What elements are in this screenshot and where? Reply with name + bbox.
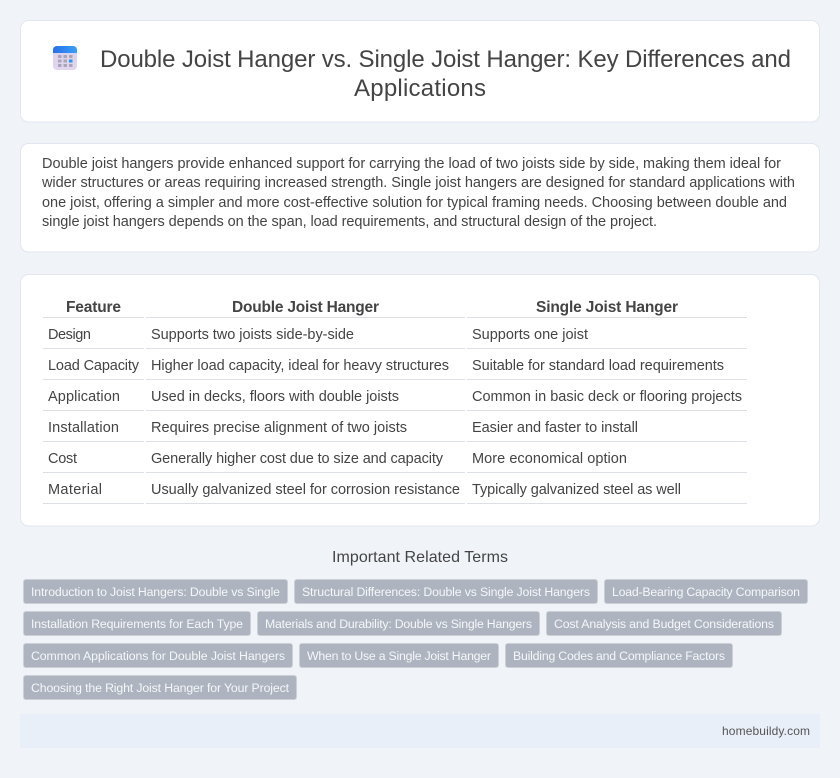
row: material: Usually galvanized steel for corrosion resistance: [151, 482, 460, 498]
row: material: Typically galvanized steel as well: [472, 482, 681, 498]
row: design: [48, 327, 588, 343]
row: design: Supports one joist: [472, 327, 588, 343]
tag: When to Use a Single Joist Hanger: [307, 649, 491, 663]
tag: Load-Bearing Capacity Comparison: [612, 585, 800, 599]
row: installation: Requires precise alignment of two joists: [151, 420, 407, 436]
text block: introduction: Double joist hangers provide enhanced support for carrying the load of two joists side by side, making them ideal for: [42, 156, 781, 172]
footer bar: [20, 714, 820, 748]
text block: introduction: one joist, offering a simpler and more cost-effective solution for typical framing needs. Choosing between double and: [42, 195, 787, 211]
row: cost: [48, 451, 627, 467]
row: load capacity: Load Capacity: [48, 358, 140, 374]
related terms tags: [24, 580, 808, 700]
table header: Single Joist Hanger: [536, 299, 678, 316]
row: installation: Easier and faster to install: [472, 420, 638, 436]
footer credit: homebuildy.com: [722, 724, 810, 738]
tag: Structural Differences: Double vs Single Joist Hangers: [302, 585, 590, 599]
tag: [24, 580, 288, 604]
tag: Building Codes and Compliance Factors: [513, 649, 725, 663]
panel: header: [20, 20, 820, 122]
row: design: Supports two joists side-by-side: [151, 327, 354, 343]
tag: [258, 612, 540, 636]
tag: Installation Requirements for Each Type: [31, 617, 243, 631]
table header: Double Joist Hanger: [232, 299, 379, 316]
row: application: Common in basic deck or flooring projects: [472, 389, 742, 405]
tag: [294, 580, 598, 604]
row: cost: Cost: [48, 451, 77, 467]
title: Applications: [354, 75, 486, 102]
row: load capacity: [48, 358, 724, 374]
row: material: [48, 482, 681, 498]
row: load capacity: Higher load capacity, ideal for heavy structures: [151, 358, 449, 374]
row: load capacity: Suitable for standard load requirements: [472, 358, 724, 374]
tag: [24, 644, 292, 668]
icon: calendar: [53, 46, 77, 70]
table header: [66, 299, 678, 316]
tag: Cost Analysis and Budget Considerations: [554, 617, 774, 631]
tag: [300, 644, 498, 668]
row: installation: Installation: [48, 420, 119, 436]
title: [100, 46, 791, 102]
table header: Feature: [66, 299, 121, 316]
panel: comparison table: [20, 274, 820, 526]
row: application: [48, 389, 742, 405]
panel: introduction: [20, 144, 820, 252]
text block: introduction: wider structures or areas requiring increased strength. Single joist hangers are designed for standard applications with: [41, 175, 795, 191]
row: cost: Generally higher cost due to size and capacity: [151, 451, 444, 467]
tag: Introduction to Joist Hangers: Double vs Single: [31, 585, 280, 599]
tag: [24, 676, 296, 700]
heading: important related terms: Important Related Terms: [332, 549, 508, 566]
row: design: Design: [48, 327, 91, 343]
row: application: Used in decks, floors with double joists: [151, 389, 399, 405]
text block: introduction: [41, 156, 795, 230]
text block: introduction: single joist hangers depends on the span, load requirements, and structural design of the project.: [42, 214, 657, 230]
row: installation: [48, 420, 638, 436]
title: Double Joist Hanger vs. Single Joist Hanger: Key Differences and: [100, 46, 791, 73]
tag: Common Applications for Double Joist Hangers: [31, 649, 285, 663]
row: cost: More economical option: [472, 451, 627, 467]
row: application: Application: [48, 389, 120, 405]
tag: Materials and Durability: Double vs Single Hangers: [265, 617, 532, 631]
tag: [506, 644, 732, 668]
tag: [546, 612, 782, 636]
tag: [604, 580, 808, 604]
tag: [24, 612, 250, 636]
row: material: Material: [48, 482, 102, 498]
tag: Choosing the Right Joist Hanger for Your Project: [31, 681, 290, 695]
